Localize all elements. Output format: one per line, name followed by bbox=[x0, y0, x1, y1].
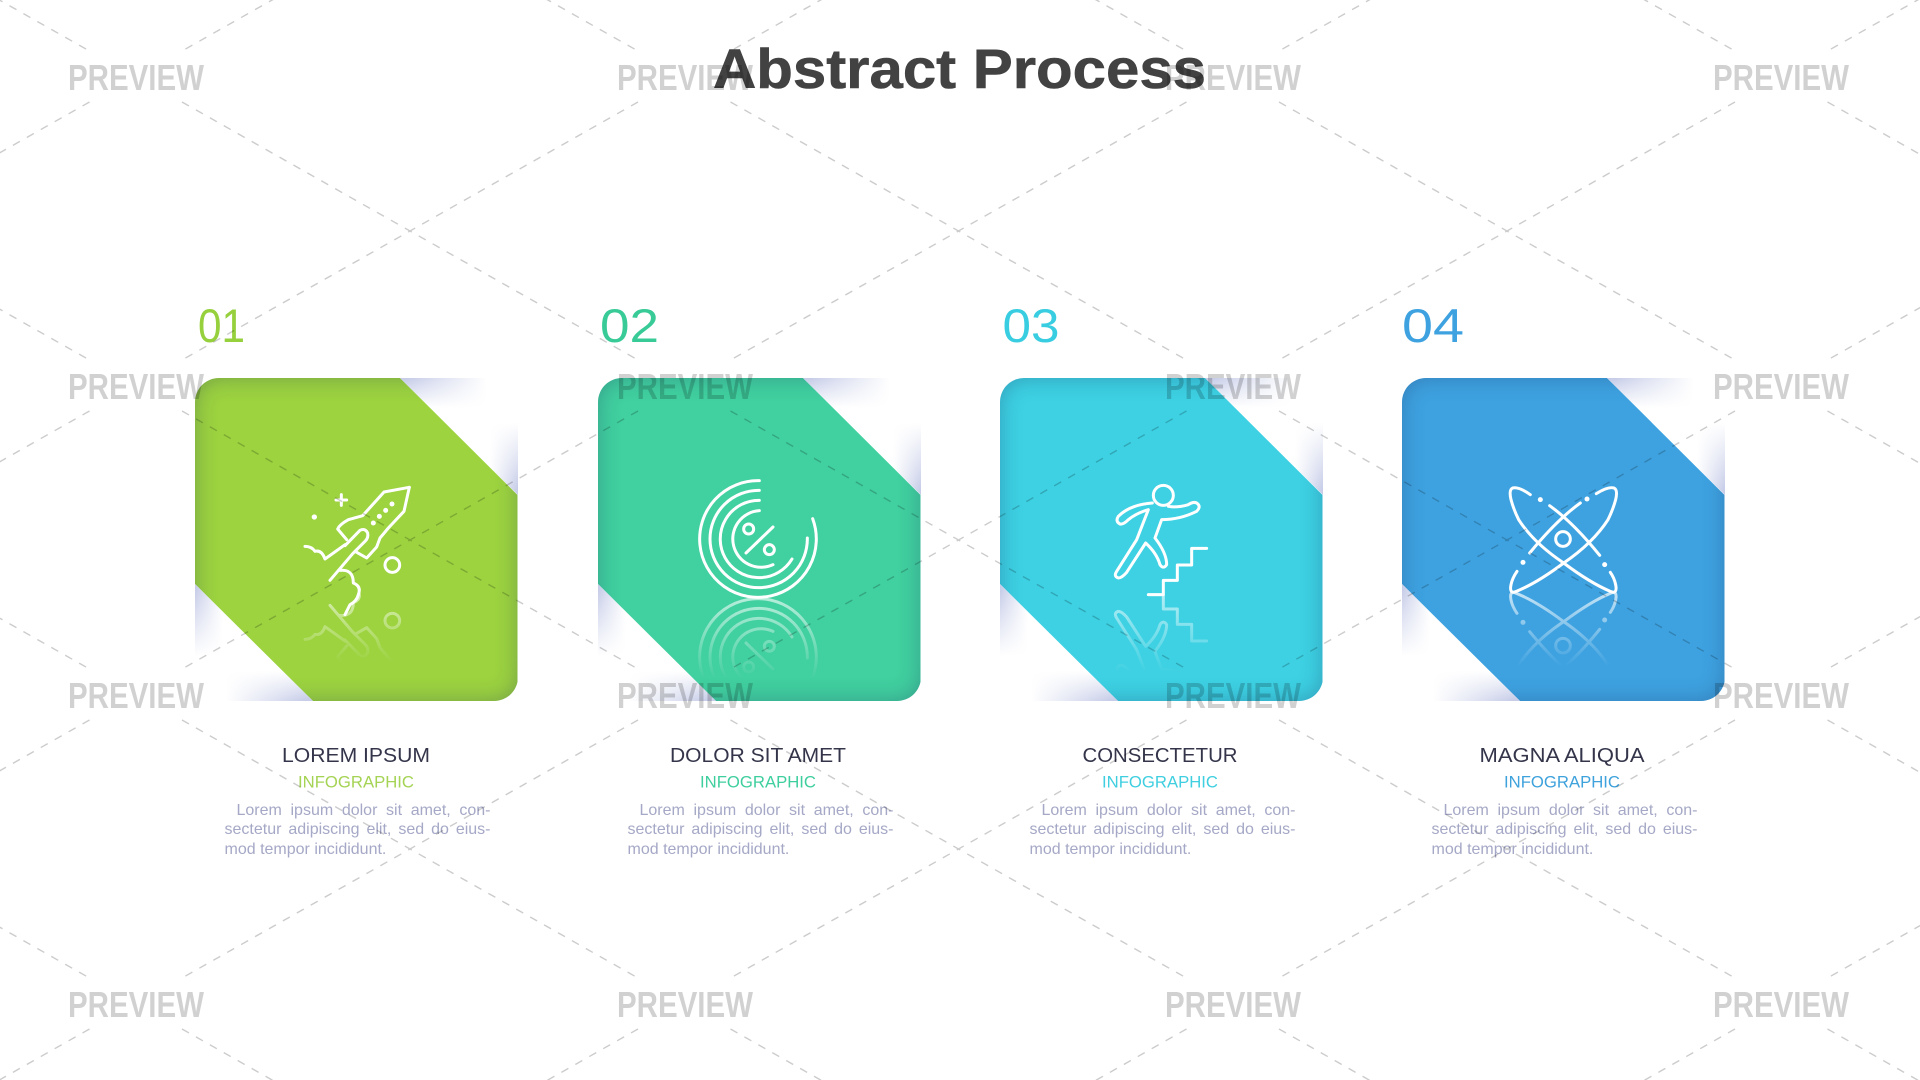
watermark overlay: PREVIEW bbox=[68, 366, 204, 407]
subheading: INFOGRAPHIC bbox=[1504, 772, 1620, 792]
panel: step 04 bbox=[1402, 299, 1725, 858]
step artwork: number, corners, icon, labels bbox=[598, 299, 921, 792]
step artwork: number, corners, icon, labels bbox=[1402, 299, 1725, 792]
description text bbox=[224, 802, 490, 858]
number 02: 02 bbox=[600, 299, 659, 352]
watermark overlay: PREVIEW bbox=[68, 675, 204, 716]
watermark overlay: PREVIEW bbox=[1713, 675, 1849, 716]
watermark overlay: PREVIEW bbox=[1713, 57, 1849, 98]
description text: sectetur adipiscing elit, sed do eius- bbox=[224, 821, 490, 838]
subheading: INFOGRAPHIC bbox=[298, 772, 414, 792]
description text bbox=[1030, 802, 1296, 858]
number 01: 01 bbox=[198, 299, 245, 352]
description text: Lorem ipsum dolor sit amet, con- bbox=[236, 802, 490, 819]
description text: sectetur adipiscing elit, sed do eius- bbox=[1030, 821, 1296, 838]
watermark overlay: PREVIEW bbox=[1165, 57, 1301, 98]
description text: mod tempor incididunt. bbox=[1030, 841, 1191, 858]
watermark overlay: PREVIEW bbox=[1713, 984, 1849, 1025]
icon: atom with reflection bbox=[1508, 486, 1618, 662]
corner shadows bbox=[1000, 378, 1323, 701]
panel: step 03 bbox=[1000, 299, 1323, 858]
description text: Lorem ipsum dolor sit amet, con- bbox=[640, 802, 894, 819]
number 03: 03 bbox=[1002, 299, 1060, 352]
description text bbox=[628, 802, 894, 858]
watermark overlay: PREVIEW bbox=[617, 57, 753, 98]
icon: runner on stairs with reflection bbox=[1114, 484, 1208, 668]
watermark overlay: PREVIEW bbox=[1165, 984, 1301, 1025]
description text: Lorem ipsum dolor sit amet, con- bbox=[1042, 802, 1296, 819]
watermark overlay: PREVIEW bbox=[617, 984, 753, 1025]
heading: LOREM IPSUM bbox=[282, 744, 430, 767]
heading: DOLOR SIT AMET bbox=[670, 744, 846, 767]
watermark overlay: PREVIEW bbox=[68, 984, 204, 1025]
watermark overlay: PREVIEW bbox=[1713, 366, 1849, 407]
panel: step 01 bbox=[195, 299, 518, 858]
panel: step 02 bbox=[598, 299, 921, 858]
card: blue rounded square with cut corners bbox=[1402, 378, 1724, 701]
step artwork: number, corners, icon, labels bbox=[1000, 299, 1323, 792]
heading: CONSECTETUR bbox=[1082, 744, 1238, 767]
watermark overlay: PREVIEW bbox=[617, 675, 753, 716]
card: teal rounded square with cut corners bbox=[598, 378, 920, 701]
description text: mod tempor incididunt. bbox=[1432, 841, 1593, 858]
card: cyan rounded square with cut corners bbox=[1000, 378, 1322, 701]
title: Abstract Process bbox=[713, 37, 1206, 100]
description text bbox=[1432, 802, 1698, 858]
heading: MAGNA ALIQUA bbox=[1480, 744, 1645, 767]
corner shadows bbox=[1402, 378, 1725, 701]
number 04: 04 bbox=[1402, 299, 1464, 352]
icon: percent target with reflection bbox=[700, 481, 816, 715]
corner shadows bbox=[598, 378, 921, 701]
description text: mod tempor incididunt. bbox=[628, 841, 789, 858]
description text: Lorem ipsum dolor sit amet, con- bbox=[1444, 802, 1698, 819]
corner shadows bbox=[195, 378, 518, 701]
subheading: INFOGRAPHIC bbox=[700, 772, 816, 792]
description text: sectetur adipiscing elit, sed do eius- bbox=[1432, 821, 1698, 838]
watermark overlay: PREVIEW bbox=[68, 57, 204, 98]
subheading: INFOGRAPHIC bbox=[1102, 772, 1218, 792]
description text: sectetur adipiscing elit, sed do eius- bbox=[628, 821, 894, 838]
card: green rounded square with cut corners bbox=[195, 378, 518, 701]
description text: mod tempor incididunt. bbox=[224, 841, 386, 858]
icon: rocket with reflection bbox=[304, 486, 411, 658]
watermark overlay: PREVIEW bbox=[1165, 366, 1301, 407]
watermark overlay: PREVIEW bbox=[617, 366, 753, 407]
watermark overlay: PREVIEW bbox=[1165, 675, 1301, 716]
step artwork: number, corners, icon, labels bbox=[195, 299, 518, 792]
